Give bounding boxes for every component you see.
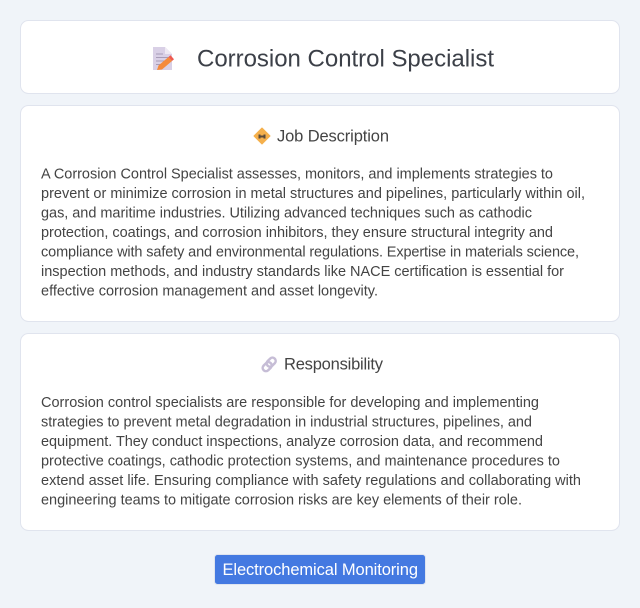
title: Corrosion Control Specialist [197,46,494,72]
text block: job description: inspection methods, and industry standards like NACE certification is essential for [41,264,564,280]
icon: link [261,356,277,373]
heading: responsibility: Responsibility [284,356,384,374]
text block: responsibility: engineering teams to mitigate corrosion risks are key elements of their role. [41,492,522,508]
button: electrochemical monitoring: Electrochemical Monitoring [222,561,418,579]
text block: responsibility: equipment. They conduct inspections, analyze corrosion data, and recommend [41,434,543,450]
text block: job description: A Corrosion Control Specialist assesses, monitors, and implements strategies to [41,166,553,182]
text block: responsibility [41,395,581,508]
text block: job description: effective corrosion management and asset longevity. [41,284,378,300]
icon: document with pencil [153,47,174,70]
text block: job description: gas, and maritime industries. Utilizing advanced techniques such as cathodic [41,206,532,222]
text block: responsibility: protective coatings, cathodic protection systems, and maintenance procedures to [41,454,560,470]
text block: job description: protection, coatings, and corrosion inhibitors, they ensure structural integrity and [41,225,553,241]
panel: responsibility [20,334,620,530]
icon: diamond sign [254,128,270,144]
panel: job description [20,106,620,322]
text block: responsibility: extend asset life. Ensuring compliance with safety regulations and collaborating with [41,473,581,489]
panel: title card [20,20,620,94]
text block: responsibility: Corrosion control specialists are responsible for developing and implementing [41,395,539,411]
heading: job description: Job Description [277,128,389,146]
text block: job description [41,166,585,300]
text block: job description: compliance with safety and environmental regulations. Expertise in materials science, [41,244,579,260]
text block: job description: prevent or minimize corrosion in metal structures and pipelines, particularly within oil, [41,186,585,202]
text block: responsibility: strategies to prevent metal degradation in industrial structures, pipelines, and [41,414,532,430]
button: electrochemical monitoring [214,554,426,584]
